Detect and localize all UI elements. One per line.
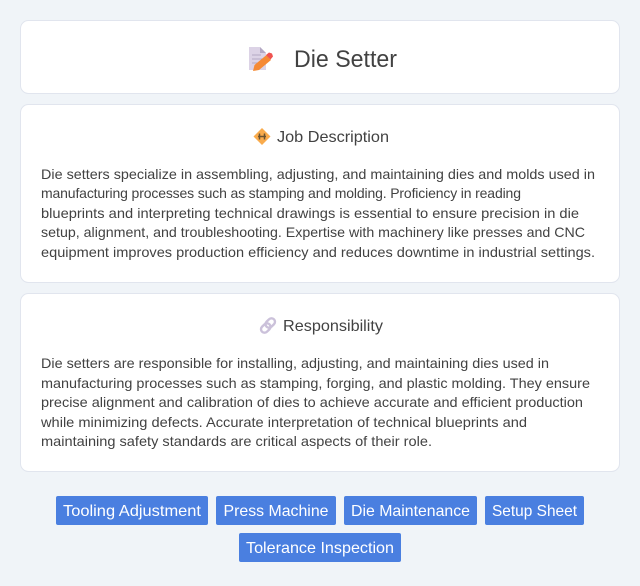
tag: Tolerance Inspection: Tolerance Inspection [246, 540, 394, 557]
icon: chain link [260, 317, 276, 334]
icon: document with pencil [249, 47, 273, 71]
tag: Die Maintenance [344, 496, 477, 525]
panel: job description [20, 104, 620, 282]
tag: Tooling Adjustment: Tooling Adjustment [63, 503, 202, 520]
tag: Tolerance Inspection [239, 533, 401, 562]
text: responsibility body: precise alignment and calibration of dies to achieve accurate and efficient production [41, 394, 583, 410]
tag: Press Machine: Press Machine [224, 503, 329, 520]
text: job description body: equipment improves production efficiency and reduces downtime in industrial settings. [41, 244, 595, 260]
text: responsibility body: while minimizing defects. Accurate interpretation of technical blueprints and [40, 414, 527, 430]
text: job description body: Die setters specialize in assembling, adjusting, and maintaining dies and molds used in [41, 166, 595, 182]
tag: Setup Sheet: Setup Sheet [492, 503, 578, 520]
text: responsibility body [40, 355, 590, 449]
panel: title card [20, 20, 620, 94]
tag: Setup Sheet [485, 496, 584, 525]
text: job description body: blueprints and interpreting technical drawings is essential to ensure precision in die [41, 205, 579, 221]
panel: responsibility [20, 294, 620, 472]
text: job description body: manufacturing processes such as stamping and molding. Proficiency in reading [41, 185, 521, 201]
tag: Press Machine [216, 496, 336, 525]
tag: Die Maintenance: Die Maintenance [351, 503, 470, 520]
title: Die Setter [294, 46, 397, 73]
text: responsibility body: Die setters are responsible for installing, adjusting, and maintaining dies used in [41, 355, 549, 371]
tag: Tooling Adjustment [56, 496, 208, 525]
text: job description body: setup, alignment, and troubleshooting. Expertise with machinery like presses and CNC [41, 224, 585, 240]
text: job description body [41, 166, 595, 260]
text: responsibility body: maintaining safety standards are critical aspects of their role. [41, 433, 432, 449]
text: responsibility body: manufacturing processes such as stamping, forging, and plastic molding. They ensure [41, 375, 590, 391]
heading: job description: Job Description [277, 129, 389, 146]
icon: orange diamond sign [254, 128, 270, 145]
heading: responsibility: Responsibility [283, 318, 383, 335]
